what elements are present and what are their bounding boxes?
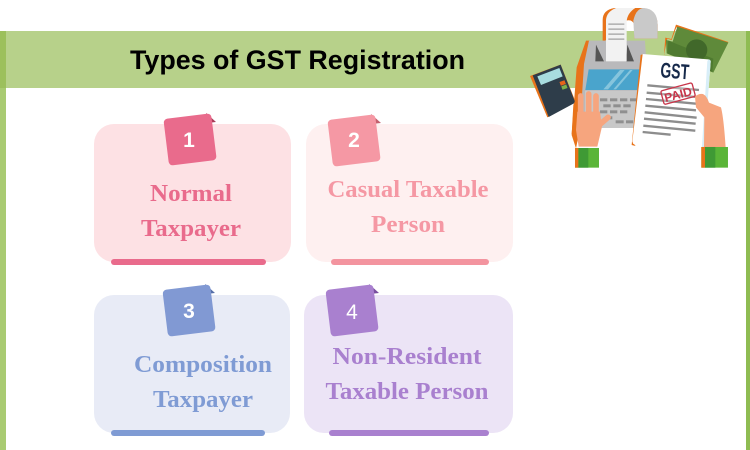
card 3 number badge: 3 xyxy=(183,300,195,323)
icon: banknotes xyxy=(664,25,728,73)
icon: GST payment illustration xyxy=(530,8,728,168)
card 1 label: Taxpayer xyxy=(141,216,241,242)
card 2 label: Person xyxy=(371,212,445,238)
card 4 underline xyxy=(329,430,489,436)
icon: left hand and sleeve xyxy=(572,94,608,168)
icon: right hand and sleeve xyxy=(695,94,728,168)
card 2 underline xyxy=(331,259,489,265)
panel: non-resident taxable person xyxy=(304,284,513,436)
card 2 label: Casual Taxable xyxy=(328,177,489,203)
card 4 number badge xyxy=(325,284,379,337)
card 1 number badge: 1 xyxy=(183,129,195,152)
card 1 underline xyxy=(111,259,266,265)
card 2 number badge: 2 xyxy=(348,129,360,152)
right edge bar xyxy=(746,31,750,450)
card 3 number badge xyxy=(162,284,216,337)
panel: composition taxpayer xyxy=(94,284,290,436)
icon: GST paid document: PAID xyxy=(663,84,694,105)
card 3 underline xyxy=(111,430,265,436)
icon: calculator xyxy=(530,65,576,117)
panel: casual taxable person xyxy=(306,114,513,265)
card 4 label: Taxable Person xyxy=(326,379,488,405)
card 2 number badge xyxy=(327,114,381,167)
icon: receipt paper xyxy=(603,8,658,63)
card 1 number badge xyxy=(163,113,217,166)
left edge bar xyxy=(0,31,6,450)
icon: GST paid document xyxy=(632,54,711,151)
card 4 number badge: 4 xyxy=(346,301,358,324)
panel: normal taxpayer xyxy=(94,113,291,265)
icon: cash register xyxy=(572,40,647,134)
card 3 label: Composition xyxy=(134,352,272,378)
card 1 label: Normal xyxy=(150,181,232,207)
card 4 label: Non-Resident xyxy=(332,344,482,370)
title: Types of GST Registration xyxy=(130,45,465,75)
icon: GST paid document: GST xyxy=(660,58,690,84)
card 3 label: Taxpayer xyxy=(153,387,253,413)
header band xyxy=(6,31,746,88)
